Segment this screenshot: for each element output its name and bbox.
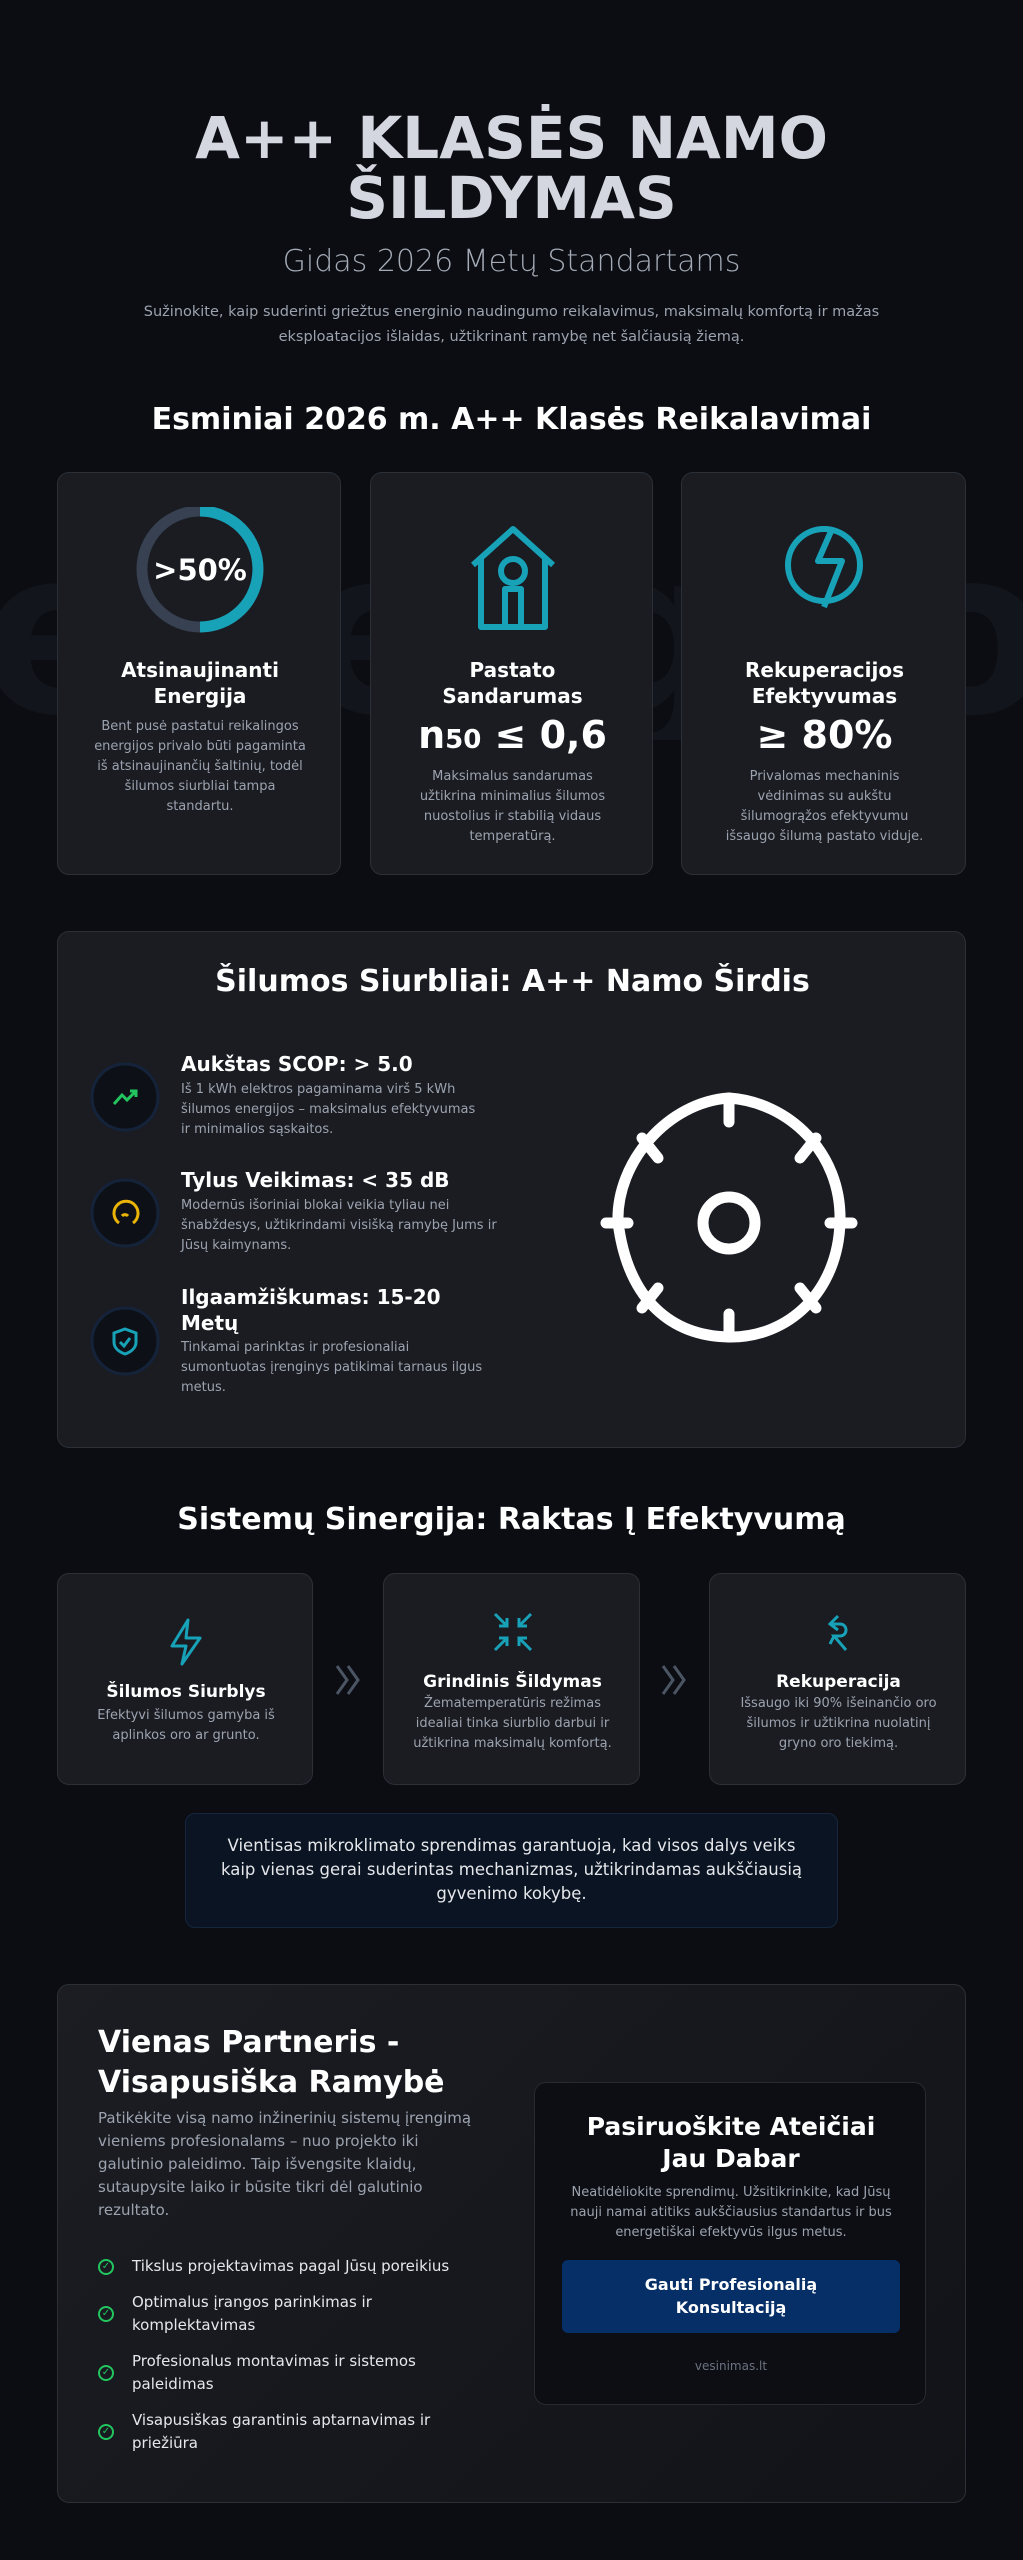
text: body: Maksimalus sandarumas užtikrina minimalius šilumos nuostolius ir stabilią vidaus temperatūrą. [420, 769, 605, 844]
checklist: ✓ [102, 2308, 110, 2319]
checklist: Visapusiškas garantinis aptarnavimas ir [132, 2411, 430, 2429]
CTA card: Jau Dabar [662, 2144, 800, 2173]
item: quiet [90, 1168, 497, 1253]
icon: trend [90, 1062, 160, 1132]
text: value: ≥ 80% [756, 713, 893, 757]
heading: Šilumos Siurbliai: A++ Namo Širdis [215, 964, 810, 999]
item: longevity [90, 1285, 482, 1395]
heading: Vienas Partneris - [98, 2025, 399, 2060]
icon: ring >50%: >50% [153, 553, 247, 587]
text: title [121, 658, 279, 708]
checklist: Tikslus projektavimas pagal Jūsų poreikius [132, 2257, 449, 2275]
icon: ring >50% [136, 507, 264, 632]
text: body: Privalomas mechaninis vėdinimas su aukštu šilumogrąžos efektyvumu išsaugo šilumą pastato viduje. [726, 769, 923, 844]
heading [98, 2025, 445, 2100]
icon: bolt [170, 1618, 202, 1666]
text: title: Sandarumas [442, 684, 583, 708]
checklist: komplektavimas [132, 2316, 255, 2334]
heading: synergy: Sistemų Sinergija: Raktas Į Efektyvumą [177, 1502, 846, 1537]
arrow [336, 1665, 360, 1695]
item: longevity: Tinkamai parinktas ir profesionaliai sumontuotas įrenginys patikimai tarnaus ilgus metus. [181, 1340, 482, 1395]
arrow [662, 1665, 686, 1695]
icon: circle bolt [785, 526, 863, 608]
icon: large gear [600, 1092, 858, 1342]
CTA card [534, 2082, 926, 2405]
icon: shield [90, 1306, 160, 1376]
paragraph: Patikėkite visą namo inžinerinių sistemų įrengimą vieniems profesionalams – nuo projekto iki galutinio paleidimo. Taip išvengsite klaidų, sutaupysite laiko ir būsite tikri dėl galutinio rezultato. [98, 2109, 471, 2219]
text: title: Energija [154, 684, 246, 708]
heading: Visapusiška Ramybė [98, 2065, 445, 2100]
checklist: Profesionalus montavimas ir sistemos [132, 2352, 416, 2370]
checklist [98, 2257, 449, 2452]
card: heat pump [57, 1573, 313, 1785]
text: title: Efektyvumas [752, 684, 897, 708]
button: Konsultaciją [676, 2298, 786, 2317]
panel: airtightness [370, 472, 653, 875]
checklist: Optimalus įrangos parinkimas ir [132, 2293, 372, 2311]
checklist: ✓ [102, 2261, 110, 2272]
text: title: Rekuperacijos [745, 658, 904, 682]
card: heat pump: Šilumos Siurblys [106, 1682, 266, 1702]
item: quiet: Modernūs išoriniai blokai veikia tyliau nei šnabždesys, užtikrindami visišką ramybę Jums ir Jūsų kaimynams. [181, 1198, 497, 1253]
icon: return arrows [828, 1615, 848, 1651]
text: title: Pastato [470, 658, 555, 682]
card: heat pump: Efektyvi šilumos gamyba iš aplinkos oro ar grunto. [97, 1708, 275, 1743]
card: recuperation [709, 1573, 966, 1785]
button: Gauti Profesionalią [645, 2275, 817, 2294]
text: body: Bent pusė pastatui reikalingos energijos privalo būti pagaminta iš atsinaujinančių šaltinių, todėl šilumos siurbliai tampa standartu. [94, 719, 306, 814]
icon: compress arrows [494, 1613, 532, 1651]
item: longevity: Ilgaamžiškumas: 15-20 Metų [181, 1285, 441, 1335]
panel: recuperation [681, 472, 966, 875]
card: recuperation: Išsaugo iki 90% išeinančio oro šilumos ir užtikrina nuolatinį gryno oro tiekimą. [740, 1696, 937, 1751]
item: SCOP [90, 1052, 475, 1137]
text: title [745, 658, 904, 708]
intro paragraph: Sužinokite, kaip suderinti griežtus energinio naudingumo reikalavimus, maksimalų komfortą ir mažas eksploatacijos išlaidas, užtikrinant ramybę net šalčiausią žiemą. [144, 304, 879, 345]
callout [185, 1813, 838, 1928]
heading: requirements: Esminiai 2026 m. A++ Klasės Reikalavimai [152, 402, 871, 437]
checklist: priežiūra [132, 2434, 198, 2452]
icon: gauge [90, 1178, 160, 1248]
icon: house [471, 526, 555, 630]
title: ŠILDYMAS [346, 164, 677, 232]
title [195, 104, 828, 232]
button [562, 2260, 900, 2333]
item: SCOP: Aukštas SCOP: > 5.0 [181, 1052, 413, 1076]
subtitle: Gidas 2026 Metų Standartams [283, 244, 740, 279]
card: floor heating: Grindinis Šildymas [423, 1672, 602, 1692]
text: title: Atsinaujinanti [121, 658, 279, 682]
item: SCOP: Iš 1 kWh elektros pagaminama virš 5 kWh šilumos energijos – maksimalus efektyvumas ir minimalios sąskaitos. [181, 1082, 475, 1137]
card: floor heating [383, 1573, 640, 1785]
checklist: ✓ [102, 2426, 110, 2437]
callout: Vientisas mikroklimato sprendimas garantuoja, kad visos dalys veiks kaip vienas gerai suderintas mechanizmas, užtikrindamas aukščiausią gyvenimo kokybę. [221, 1836, 802, 1903]
CTA card: vesinimas.lt [695, 2359, 767, 2373]
CTA card: Neatidėliokite sprendimų. Užsitikrinkite, kad Jūsų nauji namai atitiks aukščiausius standartus ir bus energetiškai efektyvūs ilgus metus. [570, 2185, 892, 2240]
CTA card: Pasiruoškite Ateičiai [587, 2112, 875, 2141]
panel: heat pumps [57, 931, 966, 1448]
panel: partner [57, 1984, 966, 2503]
title: A++ KLASĖS NAMO [195, 104, 828, 172]
checklist: paleidimas [132, 2375, 214, 2393]
card: floor heating: Žematemperatūris režimas idealiai tinka siurblio darbui ir užtikrina maksimalų komfortą. [413, 1696, 612, 1751]
panel: renewable energy [57, 472, 341, 875]
item: quiet: Tylus Veikimas: < 35 dB [181, 1168, 450, 1192]
checklist: ✓ [102, 2367, 110, 2378]
card: recuperation: Rekuperacija [776, 1672, 901, 1692]
text: value: n50 ≤ 0,6 [418, 713, 607, 757]
text: title [442, 658, 583, 708]
